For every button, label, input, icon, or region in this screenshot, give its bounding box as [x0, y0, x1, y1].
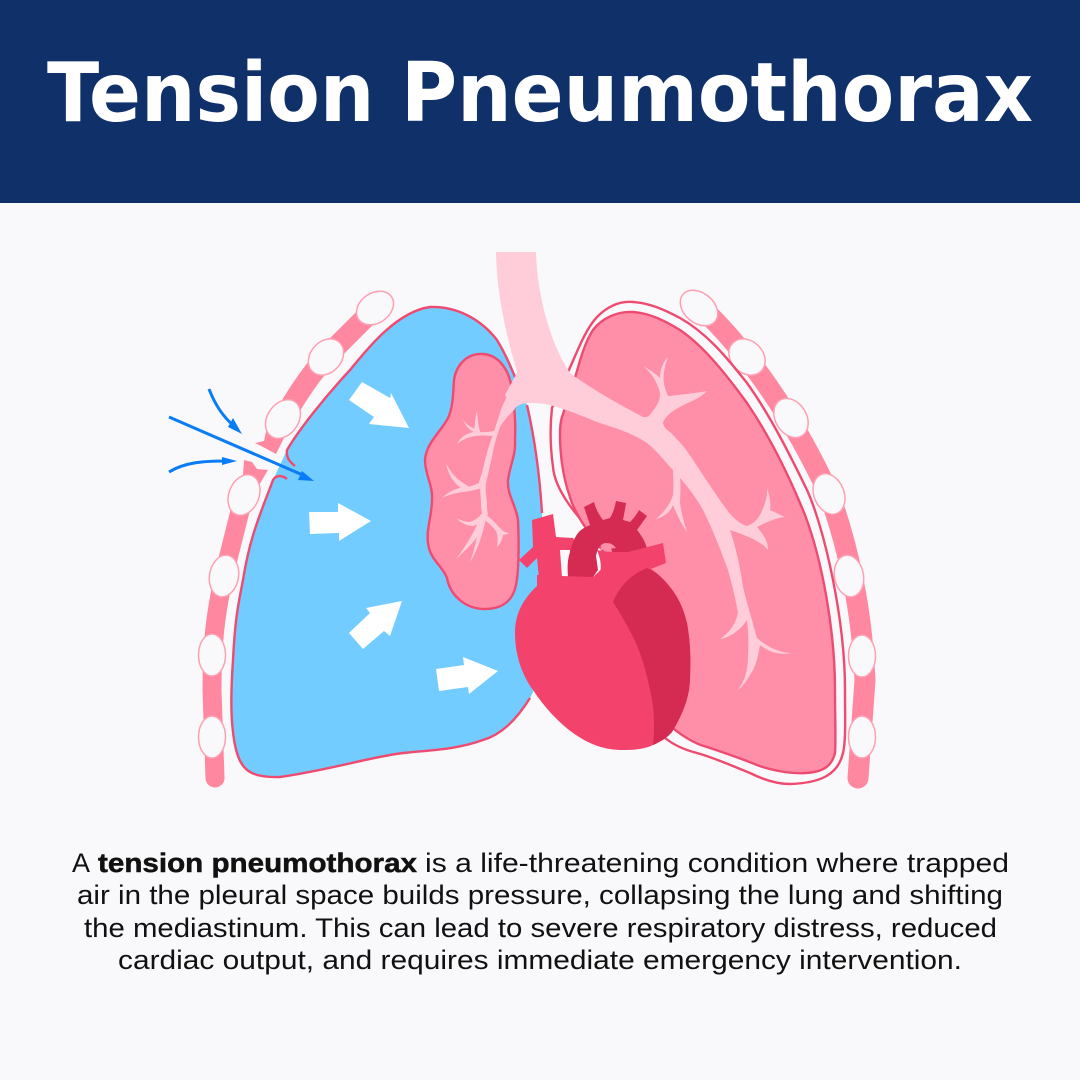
heart — [515, 501, 690, 750]
heart shaded right side — [613, 568, 690, 745]
illustration: lungs and heart — [169, 252, 876, 784]
left chest wall ribs — [198, 284, 400, 778]
description text — [72, 848, 1009, 975]
left lung: trapped air pneumothorax — [231, 307, 545, 777]
superior vena cava and branch — [519, 514, 585, 590]
trachea and bronchial tree — [442, 252, 792, 690]
description text: is a life-threatening condition where trapped — [425, 848, 1009, 878]
description text: the mediastinum. This can lead to severe respiratory distress, reduced — [84, 913, 997, 943]
left bronchus in collapsed lung — [479, 392, 515, 515]
header banner — [0, 0, 1080, 203]
title: Tension Pneumothorax — [47, 46, 1033, 141]
white gap beside vena cava — [560, 550, 570, 577]
lung visible through arch — [600, 543, 616, 550]
description text: cardiac output, and requires immediate emergency intervention. — [118, 945, 962, 975]
aortic arch — [568, 501, 647, 577]
right lung with pleura — [551, 302, 845, 784]
heart body — [515, 566, 690, 750]
collapsed lung — [425, 354, 519, 609]
description text: A — [72, 848, 90, 878]
trachea and right bronchus — [496, 252, 792, 690]
pulmonary artery — [593, 543, 666, 577]
air flow arrows — [309, 382, 498, 694]
description text: air in the pleural space builds pressure, collapsing the lung and shifting — [77, 880, 1003, 910]
blue penetrating wound arrows — [169, 389, 314, 481]
right chest wall ribs — [673, 283, 876, 778]
description text: tension pneumothorax — [98, 848, 417, 878]
